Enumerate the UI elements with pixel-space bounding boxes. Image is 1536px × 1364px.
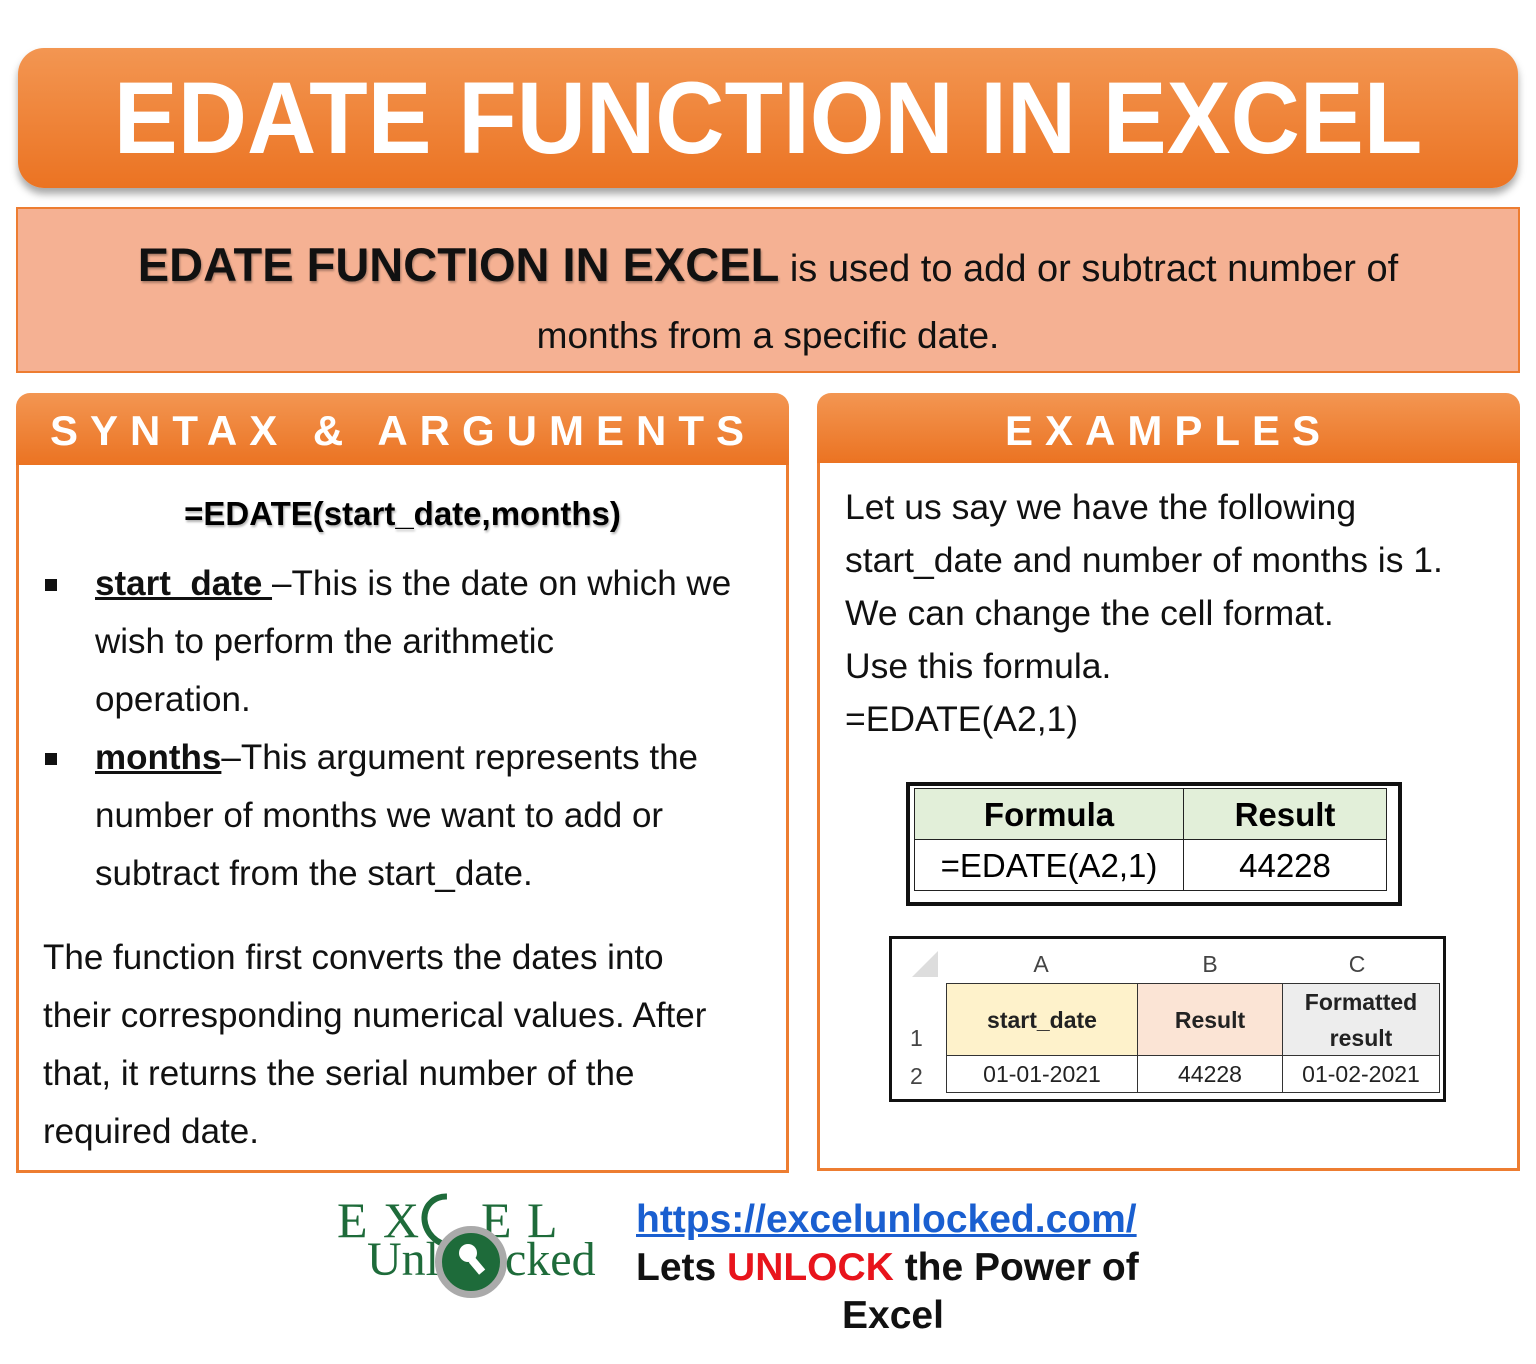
title banner: EDATE FUNCTION IN EXCEL: [114, 61, 1422, 175]
example text: =EDATE(A2,1): [845, 699, 1078, 739]
table: formula result: 44228: [1239, 847, 1331, 884]
description box: [16, 207, 1520, 373]
explanation paragraph: required date.: [43, 1112, 259, 1151]
footer: link and tagline: Excel: [842, 1294, 944, 1337]
excel sheet table: 01-01-2021: [983, 1061, 1101, 1087]
argument list: operation.: [95, 680, 251, 719]
argument list: start_date –This is the date on which we: [95, 564, 731, 603]
excel sheet table: C: [1349, 951, 1365, 977]
argument list: months–This argument represents the: [95, 738, 698, 777]
logo: Excel Unlocked: E: [481, 1192, 512, 1248]
header: examples: EXAMPLES: [1005, 407, 1332, 454]
header: examples: [817, 393, 1520, 463]
table: formula result: Result: [1235, 796, 1335, 833]
example text: Let us say we have the following: [845, 487, 1356, 527]
table: formula result: Formula: [984, 796, 1114, 833]
panel: syntax: [16, 465, 789, 1173]
example text: We can change the cell format.: [845, 593, 1334, 633]
excel sheet table: Formatted: [1305, 989, 1417, 1015]
explanation paragraph: [43, 938, 706, 1151]
example text: start_date and number of months is 1.: [845, 540, 1443, 580]
logo: Excel Unlocked: cked: [505, 1233, 596, 1286]
description box: months from a specific date.: [537, 315, 999, 356]
excel sheet table: Result: [1175, 1007, 1245, 1033]
excel sheet table: 1: [910, 1025, 923, 1051]
logo: Excel Unlocked: E: [337, 1192, 368, 1248]
description box: EDATE FUNCTION IN EXCEL is used to add or subtract number of: [138, 238, 1398, 291]
table: formula result: [906, 782, 1402, 906]
header: syntax & arguments: [16, 393, 789, 465]
excel sheet table: result: [1330, 1025, 1392, 1051]
explanation paragraph: that, it returns the serial number of the: [43, 1054, 634, 1093]
argument list: wish to perform the arithmetic: [95, 622, 554, 661]
table: formula result: =EDATE(A2,1): [941, 847, 1157, 884]
logo: Excel Unlocked: [337, 1192, 596, 1298]
logo: Excel Unlocked: X: [383, 1192, 419, 1248]
panel: examples: [817, 463, 1520, 1171]
argument list: number of months we want to add or: [95, 796, 663, 835]
footer: link and tagline: https://excelunlocked.com/: [636, 1198, 1137, 1241]
example text: [845, 487, 1443, 739]
footer: link and tagline: Lets UNLOCK the Power of: [636, 1246, 1139, 1289]
excel sheet table: [889, 936, 1446, 1102]
explanation paragraph: their corresponding numerical values. After: [43, 996, 706, 1035]
excel sheet table: start_date: [987, 1007, 1097, 1033]
excel sheet table: 01-02-2021: [1302, 1061, 1420, 1087]
logo: Excel Unlocked: L: [527, 1192, 558, 1248]
excel sheet table: B: [1202, 951, 1218, 977]
header: syntax & arguments: SYNTAX & ARGUMENTS: [50, 407, 756, 454]
explanation paragraph: The function first converts the dates into: [43, 938, 664, 977]
syntax formula: =EDATE(start_date,months): [184, 495, 621, 532]
logo: Excel Unlocked: Unl: [367, 1233, 439, 1286]
example text: Use this formula.: [845, 646, 1111, 686]
excel sheet table: 44228: [1178, 1061, 1242, 1087]
excel sheet table: 2: [910, 1063, 923, 1089]
argument list: [45, 564, 731, 893]
excel sheet table: A: [1033, 951, 1049, 977]
footer: link and tagline: [636, 1198, 1139, 1337]
argument list: subtract from the start_date.: [95, 854, 533, 893]
